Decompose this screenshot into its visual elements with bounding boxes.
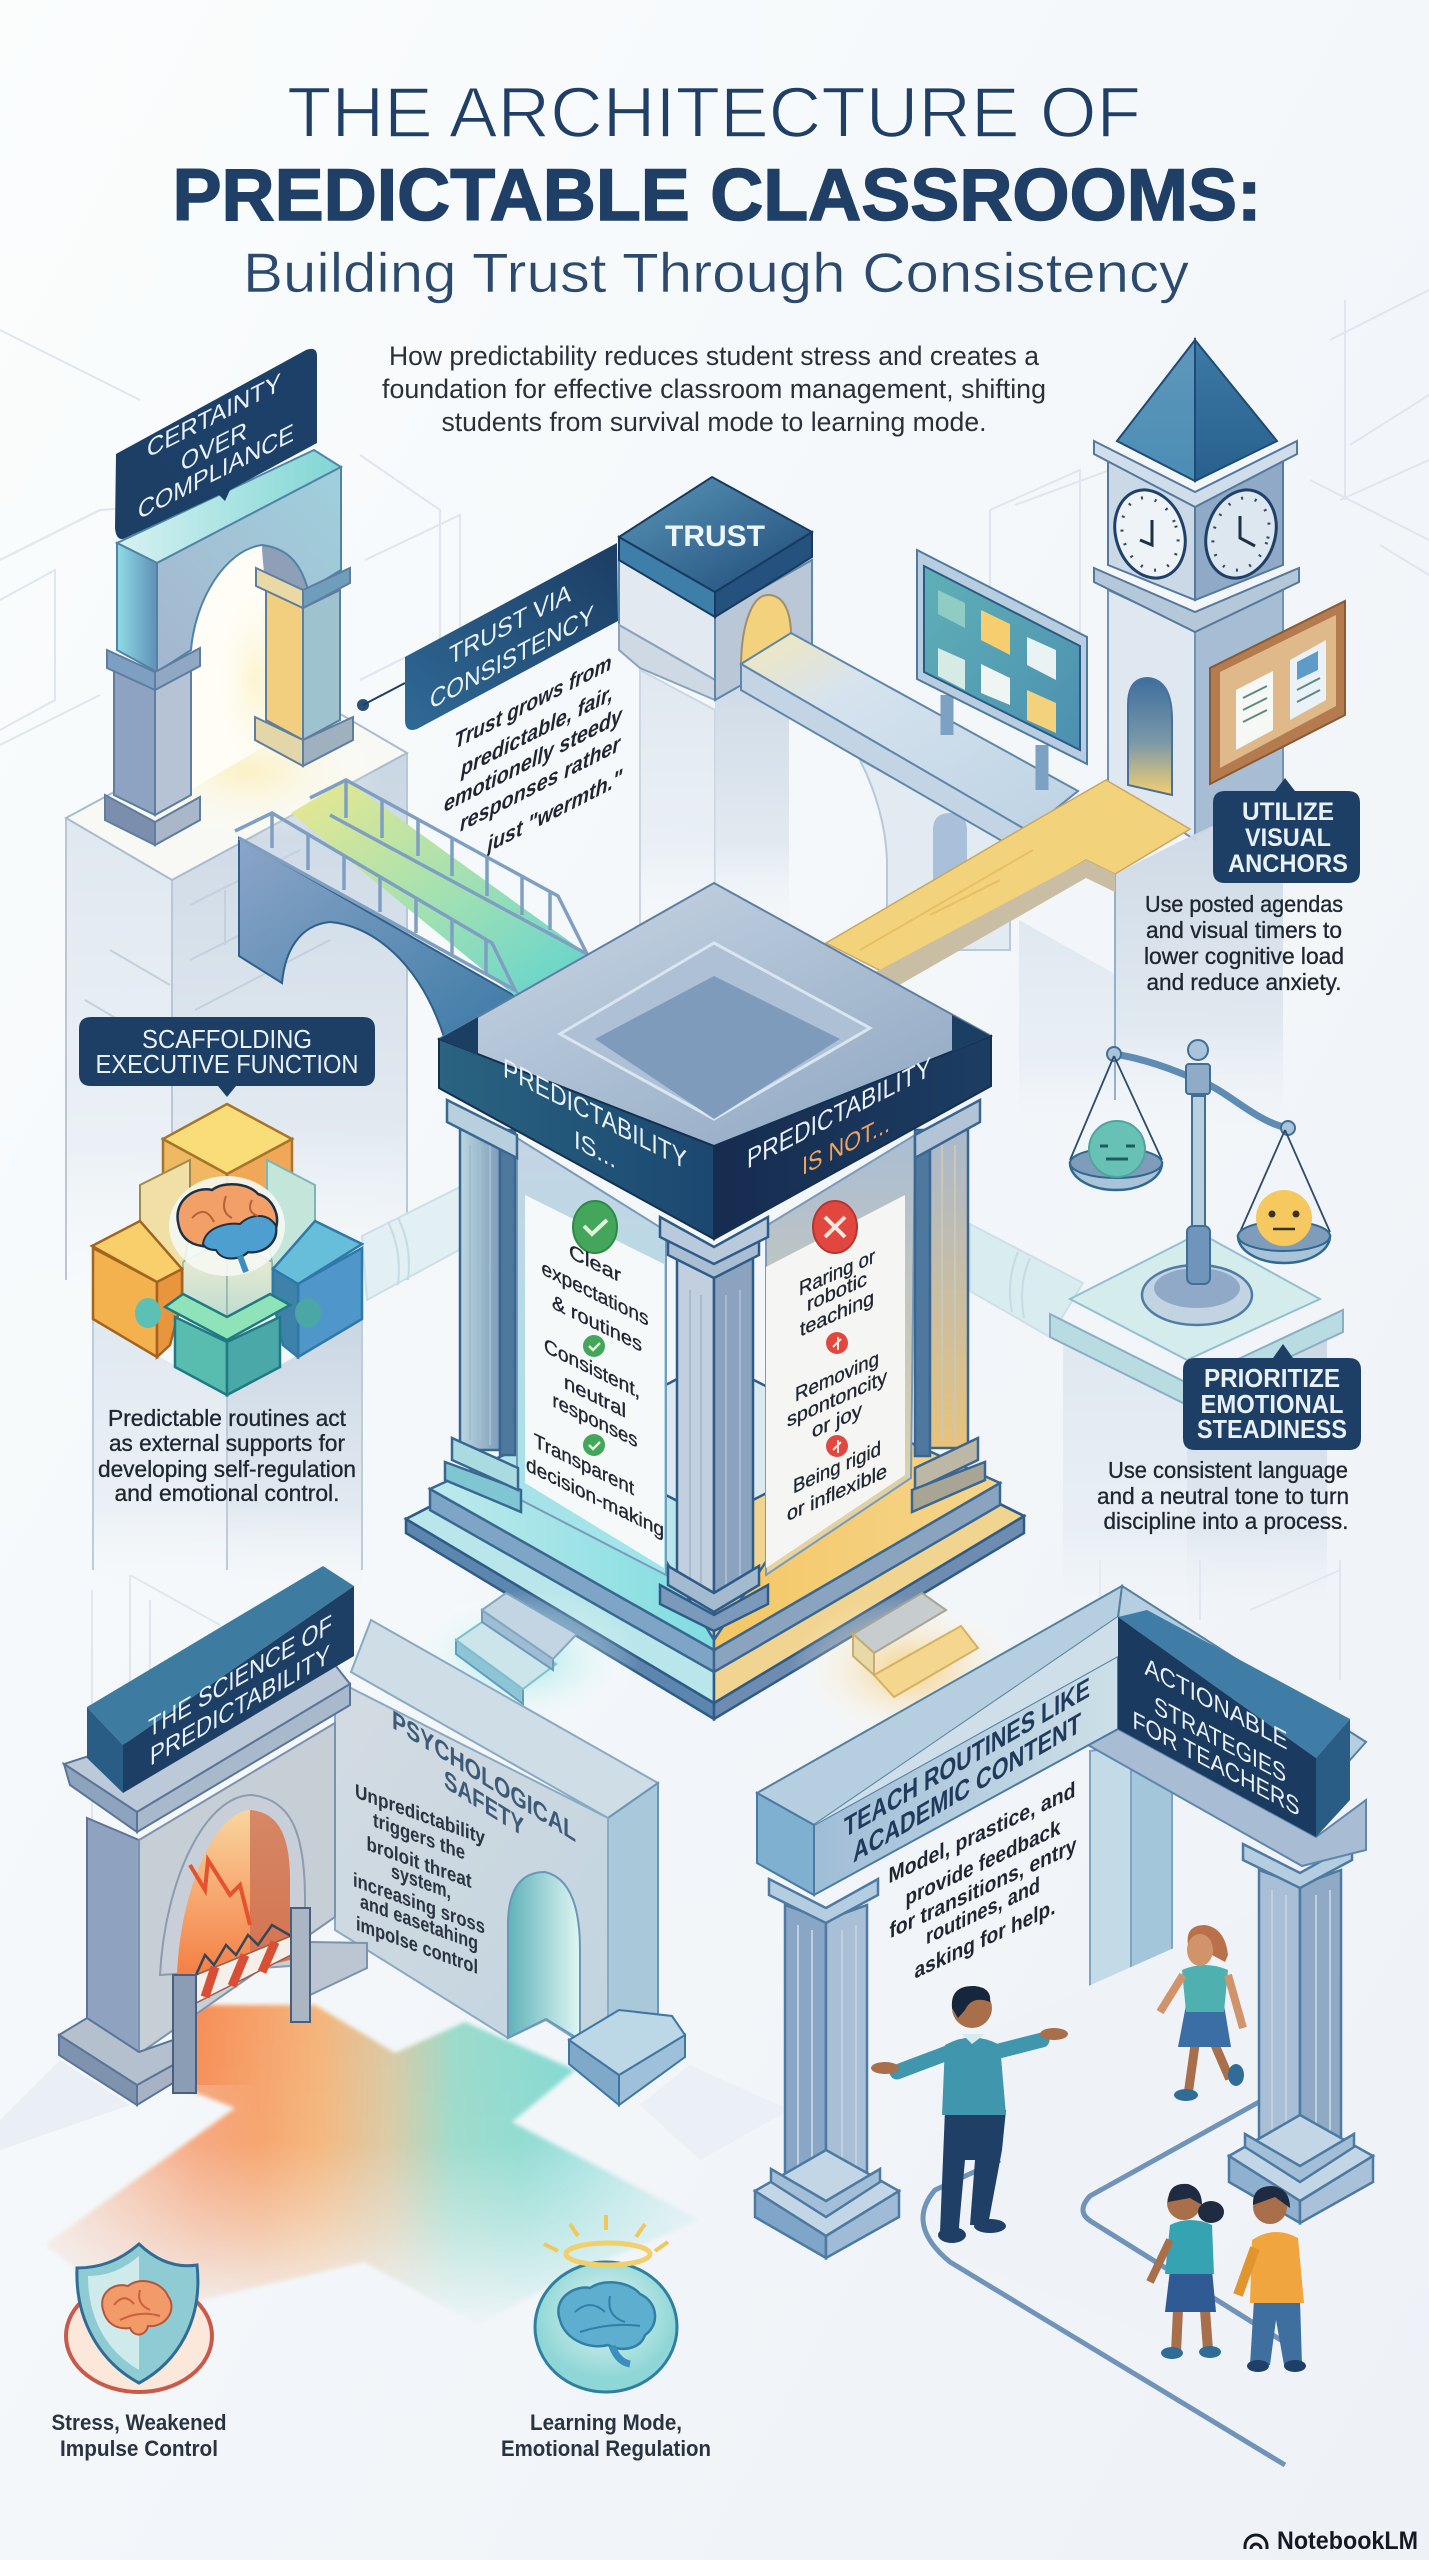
psychological wall face	[335, 1680, 608, 2060]
psychological wall top	[351, 1620, 658, 1818]
wall doorway	[508, 1872, 580, 2040]
NotebookLM logo: NotebookLM	[1277, 2527, 1418, 2555]
list text: is: responses	[552, 1389, 638, 1452]
arch block front face	[139, 1723, 335, 2054]
text: psychological body: broloit threat	[367, 1832, 472, 1893]
cork board	[1210, 601, 1345, 784]
middle band	[1094, 568, 1299, 632]
list text: is: Transparent	[534, 1430, 634, 1500]
pedestal with scale	[1050, 1040, 1343, 1620]
text: teach routines body: asking for help.	[914, 1893, 1056, 1984]
figure: walking girl	[1160, 1925, 1244, 2101]
text: teach routines body	[888, 1776, 1077, 1984]
base upper slab	[430, 1420, 1000, 1672]
title line 1: THE ARCHITECTURE OF	[287, 74, 1141, 153]
notice board	[917, 550, 1087, 790]
callout: utilize visual anchors: VISUAL	[1245, 824, 1331, 852]
floor gradient path	[45, 2005, 700, 2325]
yellow stairs	[790, 1593, 1030, 1745]
text: visual anchors	[1144, 891, 1344, 995]
arch soffit	[262, 545, 308, 610]
central monument	[400, 883, 1030, 1745]
back column	[1072, 1725, 1172, 2077]
heading: psychological safety: SAFETY	[444, 1764, 524, 1843]
trust label: TRUST	[665, 520, 765, 553]
band corners	[439, 1015, 991, 1055]
red zigzag	[190, 1860, 250, 1925]
text: psychological body: system,	[391, 1860, 451, 1904]
left beam end	[757, 1793, 814, 1895]
figure: back-view girl	[1150, 2184, 1224, 2359]
left column	[755, 1879, 899, 2258]
text: emotional steadiness	[1097, 1457, 1349, 1534]
text: trust body: just "wermth."	[485, 763, 623, 858]
callout: certainty over compliance: COMPLIANCE	[138, 418, 294, 525]
callout: prioritize emotional steadiness	[1183, 1344, 1361, 1450]
callout: trust via consistency	[357, 543, 618, 730]
monument band left	[439, 1039, 714, 1239]
teal stairs	[400, 1590, 640, 1730]
callout: trust via consistency: CONSISTENCY	[430, 599, 594, 715]
figure: back-view boy	[1238, 2186, 1306, 2372]
tower lower shaft	[640, 670, 715, 930]
list text: is not	[787, 1245, 887, 1526]
text: visual anchors: lower cognitive load	[1144, 943, 1344, 969]
icon: calm brain with halo	[535, 2215, 677, 2392]
list text: is: Consistent,	[544, 1335, 640, 1403]
right pillar	[255, 568, 353, 766]
dark banner	[1118, 1610, 1350, 1837]
connecting pipes	[362, 1182, 1083, 1337]
walkway path	[923, 1910, 1310, 2465]
beam text: ACADEMIC CONTENT	[853, 1707, 1081, 1869]
label: stress	[52, 2410, 226, 2461]
panel: certainty arch	[105, 349, 353, 845]
text: teach routines body: for transitions, entry	[890, 1831, 1077, 1943]
clock left	[1104, 481, 1196, 587]
science label block: THE SCIENCE OF	[148, 1609, 332, 1744]
callout: scaffolding executive function	[79, 1017, 375, 1097]
trust tower	[619, 477, 812, 930]
callout: utilize visual anchors: UTILIZE	[1242, 798, 1334, 826]
right beam top strip	[1118, 1586, 1366, 1760]
board posts	[947, 695, 1042, 790]
orange cube	[92, 1221, 182, 1357]
band label: is not: PREDICTABILITY	[747, 1052, 931, 1175]
list text: is not: or joy	[812, 1398, 862, 1443]
wall corner base	[569, 2010, 685, 2105]
list text: is: decision-making	[526, 1453, 664, 1542]
panel: predictability is not	[766, 1195, 905, 1568]
heading: psychological safety: PSYCHOLOGICAL	[392, 1705, 576, 1849]
band label: is: IS...	[574, 1125, 616, 1174]
faint background wireframes	[0, 290, 1429, 1880]
calm face	[1089, 1121, 1145, 1177]
tower door	[1128, 678, 1172, 795]
check icon large	[573, 1201, 617, 1253]
figure: teacher	[871, 1986, 1068, 2243]
brain	[169, 1176, 285, 1276]
text: scaffolding: developing self-regulation	[98, 1456, 356, 1482]
small x icons	[826, 1332, 848, 1457]
callout: prioritize emotional steadiness: EMOTIONAL	[1200, 1389, 1344, 1419]
text: trust body: responses rather	[460, 730, 622, 836]
callout: scaffolding executive function: EXECUTIVE FUNCTION	[96, 1049, 358, 1079]
left beam front	[814, 1656, 1118, 1895]
scale beam	[1114, 1054, 1288, 1128]
text: psychological body: triggers the	[373, 1809, 465, 1865]
callout: scaffolding executive function: SCAFFOLDING	[142, 1024, 312, 1054]
base lower slab	[406, 1360, 1024, 1719]
clock tower	[1094, 340, 1299, 840]
beam text: TEACH ROUTINES LIKE	[844, 1672, 1090, 1844]
intro text	[382, 341, 1046, 437]
list text: is not: spontoncity	[787, 1365, 887, 1432]
barrier	[173, 1908, 310, 2093]
stone bridge	[235, 780, 587, 1040]
bridge deck	[291, 780, 587, 996]
text: scaffolding: and emotional control.	[114, 1480, 340, 1506]
pedestal plate	[1050, 1310, 1343, 1405]
list text: is not: Being rigid	[793, 1437, 881, 1498]
text: scaffolding: as external supports for	[109, 1430, 345, 1456]
callout: utilize visual anchors: ANCHORS	[1228, 850, 1348, 878]
arch block left face	[87, 1818, 139, 2054]
text: teach routines body: Model, prastice, and	[888, 1776, 1076, 1888]
right column	[912, 1100, 985, 1512]
list text: is not: robotic	[807, 1267, 867, 1316]
text: teach routines body: provide feedback	[906, 1814, 1061, 1911]
text: scaffolding: Predictable routines act	[108, 1405, 347, 1431]
text: emotional steadiness: discipline into a process.	[1104, 1508, 1348, 1534]
center block	[183, 1240, 272, 1317]
pedestal top	[1070, 1233, 1320, 1360]
icon: puzzle blocks with brain	[92, 1104, 362, 1395]
text: psychological body	[353, 1780, 485, 1979]
glass walkway	[741, 633, 1078, 831]
top yellow cube	[163, 1104, 292, 1240]
text: psychological body: impolse control	[356, 1912, 478, 1979]
subtitle: Building Trust Through Consistency	[243, 241, 1189, 304]
callout: trust via consistency: TRUST VIA	[449, 577, 571, 671]
monument top	[439, 883, 991, 1146]
title line 2: PREDICTABLE CLASSROOMS:	[172, 155, 1262, 236]
label: stress: Impulse Control	[60, 2436, 218, 2461]
right pan	[1238, 1130, 1330, 1263]
green block	[135, 1294, 321, 1395]
label: learning mode	[501, 2410, 711, 2461]
label: learning mode: Emotional Regulation	[501, 2436, 711, 2461]
left beam top	[757, 1586, 1122, 1825]
right plinth	[1019, 790, 1283, 1130]
lower tower faces	[1108, 590, 1195, 840]
list text: is not: or inflexible	[787, 1460, 887, 1526]
dark banner: ACTIONABLE	[1144, 1652, 1288, 1756]
panel: actionable strategies gate	[755, 1586, 1373, 2465]
background pillar under walkway	[860, 760, 1010, 950]
fire doorway	[160, 1795, 305, 1975]
callout: certainty over compliance: OVER	[181, 416, 247, 477]
panel: science of predictability	[59, 1566, 685, 2105]
left plinth column	[66, 691, 407, 1290]
text: trust body: Trust grows from	[454, 649, 612, 754]
halo rays	[544, 2215, 668, 2251]
x icon large	[813, 1201, 857, 1253]
text: psychological body: Unpredictability	[355, 1780, 485, 1850]
label: learning mode: Learning Mode,	[530, 2410, 682, 2435]
clock housing	[1108, 460, 1195, 600]
middle column	[660, 1217, 768, 1631]
callout: utilize visual anchors	[1213, 778, 1360, 883]
arch opening	[191, 545, 308, 790]
science label block: PREDICTABILITY	[150, 1639, 330, 1772]
tower upper faces	[619, 560, 715, 680]
halo	[566, 2243, 650, 2265]
list text: is	[526, 1240, 664, 1542]
list text: is: neutral	[564, 1371, 626, 1423]
bridge railings	[235, 780, 587, 990]
left column	[445, 1100, 521, 1512]
lower left pedestal column	[93, 1319, 362, 1590]
dark banner: FOR TEACHERS	[1132, 1705, 1300, 1822]
text: trust body: emotionelly steedy	[444, 701, 623, 817]
psychological wall right side	[608, 1783, 658, 2060]
beam under right section	[1088, 1729, 1366, 1866]
text: emotional steadiness: and a neutral tone to turn	[1097, 1483, 1349, 1509]
text: psychological body: and easetahing	[360, 1890, 478, 1955]
text: trust body: predictable, fair,	[460, 680, 613, 782]
title block	[172, 74, 1262, 304]
band label: is: PREDICTABILITY	[503, 1053, 687, 1176]
list text: is: expectations	[542, 1257, 648, 1331]
right wall	[766, 1135, 915, 1575]
spire	[1117, 340, 1195, 481]
panel: predictability is	[525, 1195, 664, 1568]
floor shadows	[0, 2060, 790, 2160]
science label block	[87, 1566, 354, 1793]
text: trust body	[444, 649, 623, 858]
dark banner: STRATEGIES	[1154, 1690, 1286, 1789]
text: scaffolding	[98, 1405, 356, 1506]
cornice	[64, 1665, 350, 1812]
board frame	[917, 550, 1087, 764]
tower arch tunnel	[741, 595, 791, 668]
band label: is not: IS NOT...	[802, 1108, 890, 1181]
heading: psychological safety	[392, 1705, 576, 1849]
callout: prioritize emotional steadiness: STEADINESS	[1197, 1414, 1347, 1444]
list text: is not: Raring or	[799, 1245, 875, 1301]
arch front face	[157, 467, 341, 672]
arch side face	[117, 543, 157, 672]
text: visual anchors: and visual timers to	[1146, 917, 1342, 943]
list text: is not: Removing	[795, 1347, 879, 1406]
text: visual anchors: and reduce anxiety.	[1146, 969, 1342, 995]
board tiles	[938, 590, 965, 628]
left pan	[1070, 1056, 1162, 1190]
arch top	[117, 450, 341, 563]
scale base	[1142, 1265, 1252, 1325]
right column	[1229, 1844, 1373, 2223]
neutral face	[1256, 1190, 1312, 1246]
arch block base	[59, 2018, 173, 2105]
blue cube	[273, 1221, 362, 1357]
callout: certainty over compliance	[115, 349, 317, 539]
bridge side	[239, 838, 515, 1040]
left wall	[517, 1138, 666, 1575]
left pillar	[105, 648, 200, 845]
label: stress: Stress, Weakened	[52, 2410, 226, 2435]
callout: prioritize emotional steadiness: PRIORITIZE	[1204, 1363, 1340, 1393]
intro text: foundation for effective classroom management, shifting	[382, 374, 1046, 404]
intro text: How predictability reduces student stress and creates a	[389, 341, 1040, 371]
tower roof	[619, 537, 715, 617]
list text: is not: teaching	[800, 1286, 874, 1341]
monument band right	[714, 1036, 991, 1239]
text: psychological body: increasing sross	[353, 1869, 485, 1939]
text: emotional steadiness: Use consistent language	[1108, 1457, 1348, 1483]
pinned notes	[1236, 640, 1326, 750]
callout: certainty over compliance: CERTAINTY	[147, 367, 281, 464]
board screen	[924, 566, 1080, 750]
list text: is: Clear	[569, 1240, 621, 1287]
small checks	[583, 1335, 605, 1456]
text: teach routines body: routines, and	[926, 1871, 1040, 1949]
intro text: students from survival mode to learning mode.	[442, 407, 986, 437]
translucent side panels	[140, 1160, 190, 1270]
monument recess	[560, 943, 870, 1119]
text: visual anchors: Use posted agendas	[1145, 891, 1343, 917]
pedestal body	[1063, 1345, 1187, 1620]
clock right	[1195, 481, 1287, 587]
icon: shield with stressed brain	[66, 2244, 212, 2392]
list text: is: & routines	[552, 1291, 642, 1357]
yellow bridge	[826, 780, 1190, 992]
roof eave	[1094, 441, 1297, 507]
